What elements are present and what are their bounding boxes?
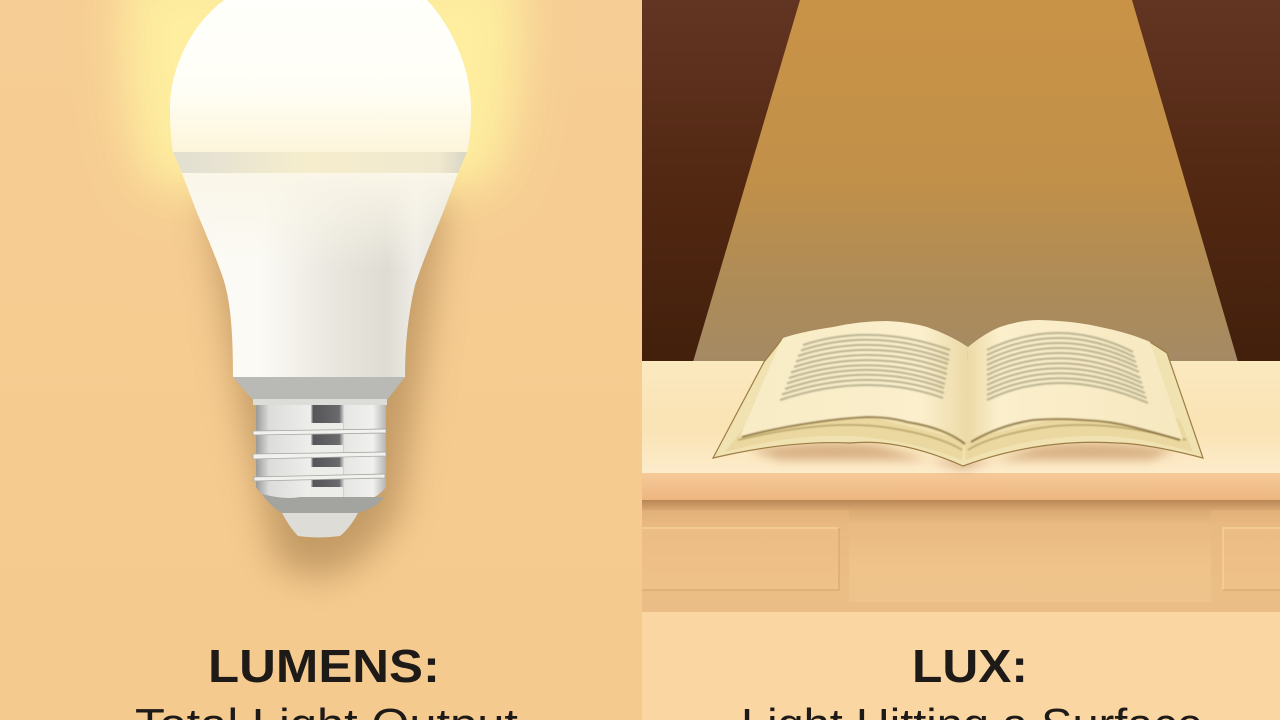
icon: light bulb [170, 0, 471, 538]
book shadow [750, 443, 1175, 470]
page shadow lines [742, 417, 965, 444]
book text lines [780, 333, 1148, 403]
cover and page block [713, 338, 1203, 466]
panel: lumens [0, 0, 642, 720]
desk edge [642, 473, 1280, 500]
desk top [642, 361, 1280, 473]
icon: open book [713, 320, 1203, 466]
heading: lumens: LUMENS: [208, 640, 440, 692]
bulb shadow [205, 190, 445, 577]
bulb glow [123, 0, 522, 190]
light beam [693, 0, 1238, 362]
panel: lux [642, 0, 1280, 720]
dark wall [642, 0, 1280, 362]
right page [967, 320, 1183, 443]
desk front [642, 500, 1280, 612]
left page [740, 321, 968, 443]
heading: lux: LUX: [912, 640, 1028, 692]
